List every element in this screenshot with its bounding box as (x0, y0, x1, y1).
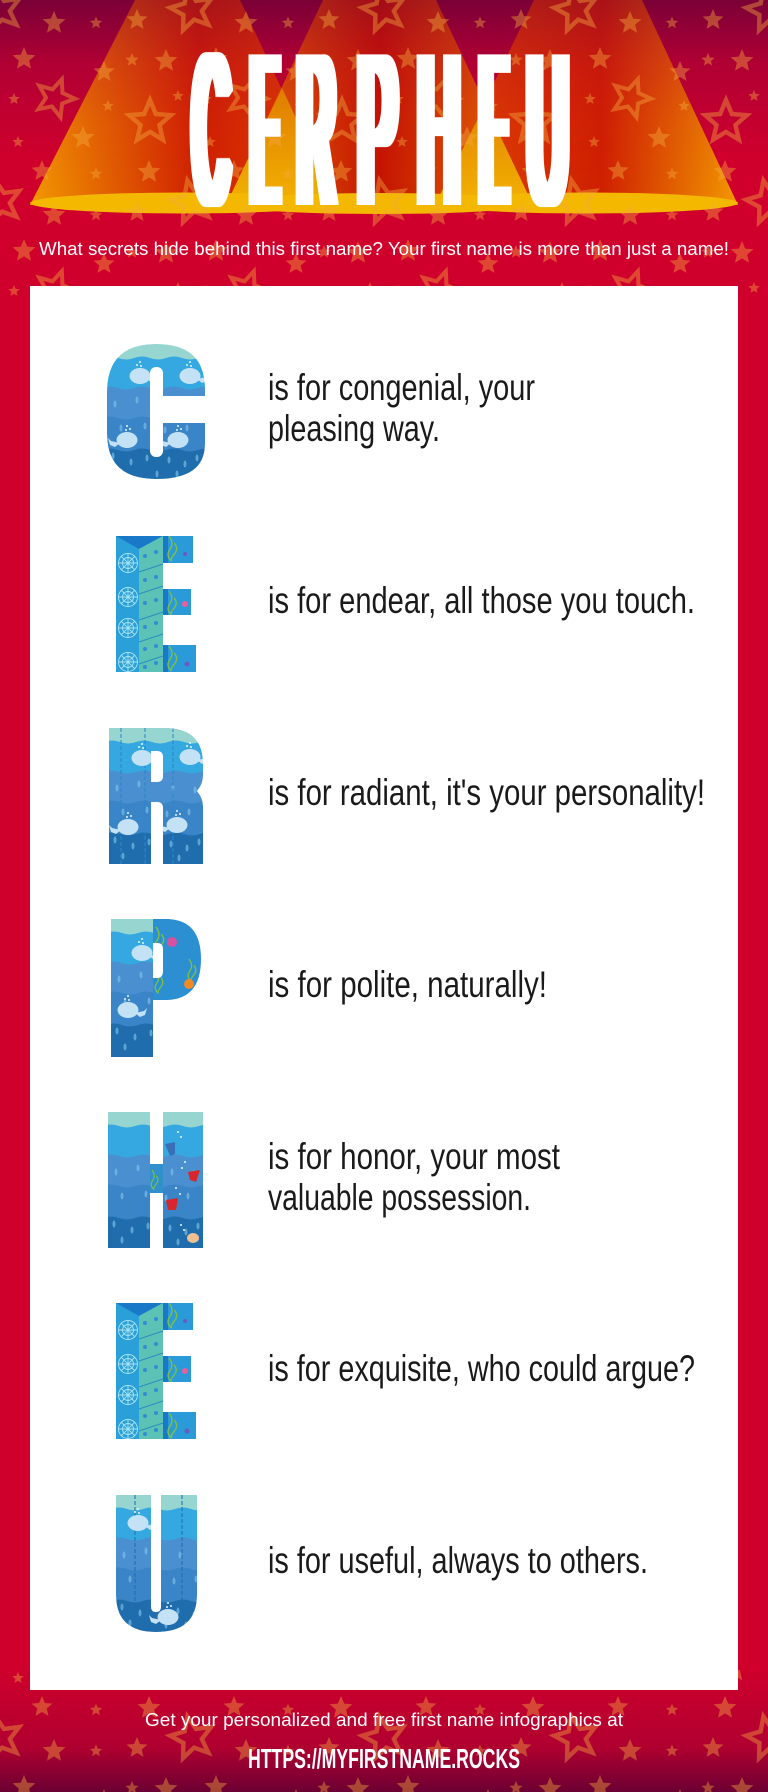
title: P (358, 8, 396, 250)
star pattern top (0, 0, 768, 300)
letter R illustration (109, 728, 203, 864)
letter P illustration (111, 919, 201, 1057)
row C (102, 342, 535, 486)
panel: white content card (30, 286, 738, 1690)
title: C (194, 8, 229, 250)
letter U illustration (116, 1495, 197, 1632)
cone overlap right (435, 104, 533, 205)
letter E illustration (116, 536, 196, 672)
text C (268, 367, 535, 449)
text H: is for honor, your most (268, 1136, 561, 1177)
star pattern bottom (0, 1670, 768, 1792)
text H: valuable possession. (268, 1177, 531, 1218)
text H (268, 1136, 561, 1218)
footer url: HTTPS://MYFIRSTNAME.ROCKS (248, 1743, 520, 1774)
row P (106, 917, 547, 1061)
letter H illustration (108, 1112, 203, 1248)
text C: is for congenial, your (268, 367, 535, 408)
title: H (418, 8, 459, 250)
row E (116, 536, 695, 672)
title (194, 8, 568, 250)
title: E (252, 8, 278, 250)
letter C illustration (107, 344, 205, 479)
row U (111, 1493, 648, 1637)
spotlight floor ellipses (30, 192, 738, 214)
title: R (298, 8, 334, 250)
text C: pleasing way. (268, 408, 440, 449)
row E second (116, 1303, 695, 1439)
footer text: Get your personalized and free first name infographics at (145, 1709, 623, 1730)
spotlights (30, 0, 738, 214)
subtitle: What secrets hide behind this first name? Your first name is more than just a name! (39, 238, 729, 259)
row H (103, 1110, 561, 1254)
cone overlap left (226, 88, 336, 205)
spotlight cone left (30, 0, 282, 205)
text U: is for useful, always to others. (268, 1540, 648, 1581)
text: U (528, 8, 568, 250)
letter E illustration second (116, 1303, 196, 1439)
title: E (481, 8, 507, 250)
spotlight cone right (470, 0, 738, 205)
row R (104, 726, 705, 870)
spotlight cone centre (232, 0, 478, 194)
text P: is for polite, naturally! (268, 964, 547, 1005)
